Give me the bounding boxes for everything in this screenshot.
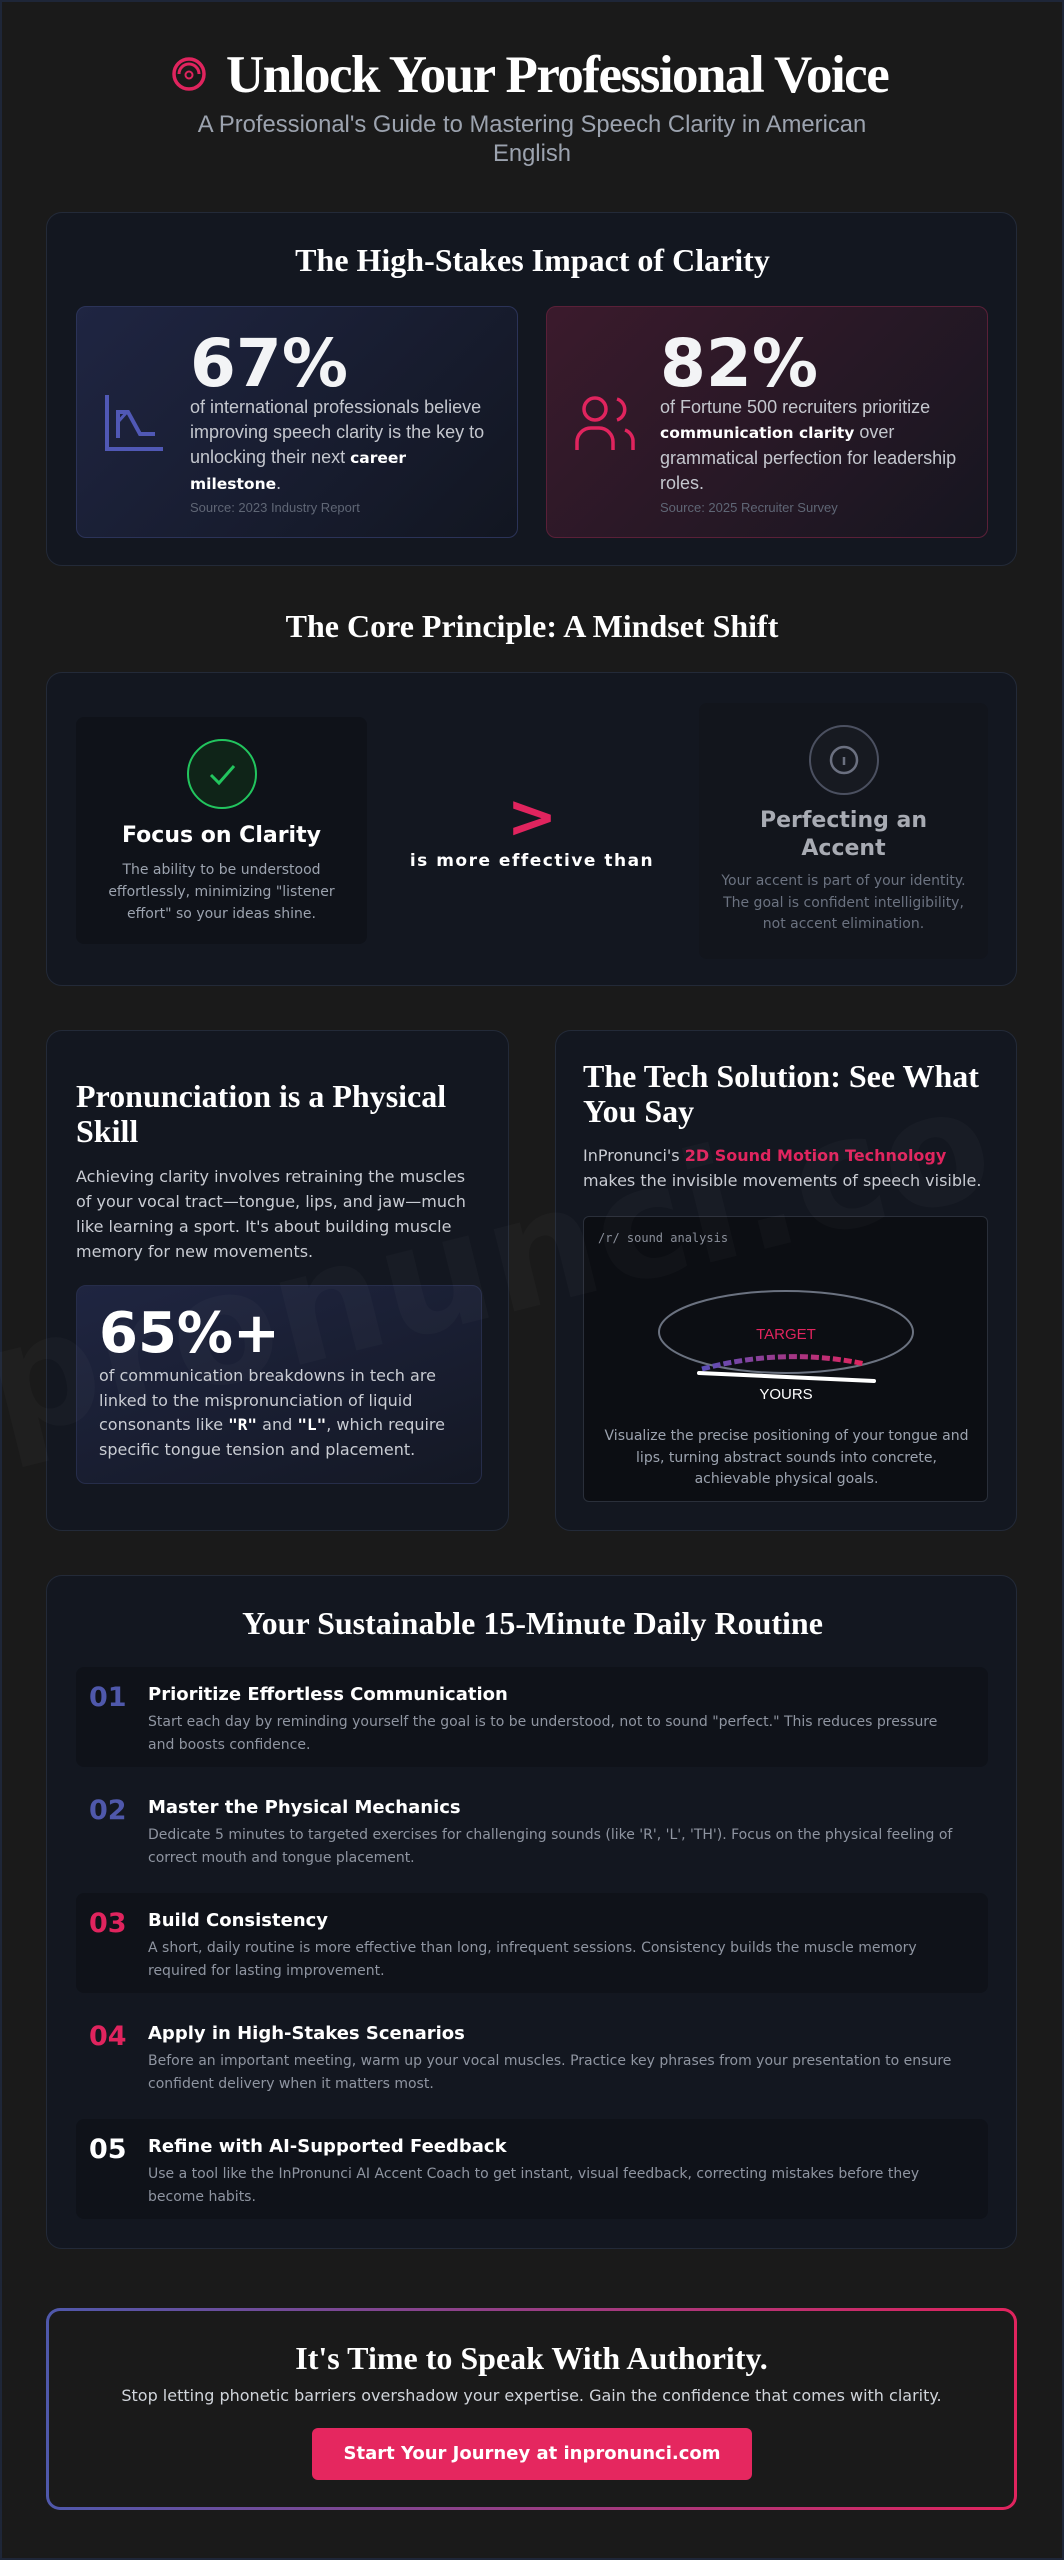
chart: target vs yours [658, 1290, 914, 1403]
stat card: 82% [546, 306, 988, 538]
step 05: Refine with AI-Supported Feedback [148, 2136, 507, 2157]
step 02: Master the Physical Mechanics [148, 1797, 461, 1818]
step 03: Build Consistency [148, 1910, 328, 1931]
step 02: 02 [89, 1795, 127, 1826]
step 03: 03 [89, 1908, 127, 1939]
stat card: 82%: Source: 2025 Recruiter Survey [660, 500, 838, 515]
panel: tech solution [555, 1030, 1017, 1531]
analysis visual: Visualize the precise positioning of your tongue and lips, turning abstract sounds into concrete, achievable physical goals. [605, 1428, 968, 1487]
paragraph: Achieving clarity involves retraining the muscles of your vocal tract—tongue, lips, and jaw—much like learning a sport. It's about building muscle memory for new movements. [76, 1167, 466, 1261]
step 02: Dedicate 5 minutes to targeted exercises for challenging sounds (like 'R', 'L', 'TH'). Focus on the physical feeling of correct mouth and tongue placement. [148, 1827, 952, 1866]
analysis visual [583, 1216, 988, 1502]
step 01: Start each day by reminding yourself the goal is to be understood, not to sound "perfect." This reduces pressure and boosts confidence. [148, 1714, 937, 1752]
chart: target vs yours: TARGET [756, 1326, 816, 1343]
box: perfecting accent: Accent [801, 836, 886, 861]
panel: high-stakes impact [46, 212, 1017, 566]
stat card: 82%: 82% [660, 325, 818, 402]
step 05: 05 [89, 2134, 127, 2165]
box: focus on clarity: Focus on Clarity [122, 823, 321, 848]
heading: The Tech Solution: See What You Say [583, 1058, 979, 1129]
stat card: 67%: Source: 2023 Industry Report [190, 500, 360, 515]
stat box: 65%+: 65%+ [99, 1301, 280, 1366]
comparison arrow [410, 782, 654, 871]
step 01: Prioritize Effortless Communication [148, 1684, 508, 1705]
icon: target [172, 57, 206, 91]
step 01 [76, 1667, 988, 1767]
step 04 [89, 2021, 951, 2092]
box: focus on clarity: The ability to be understood effortlessly, minimizing "listener effort" so your ideas shine. [108, 862, 335, 922]
comparison arrow: > [507, 782, 557, 852]
step 05 [76, 2119, 988, 2219]
step 05: Use a tool like the InPronunci AI Accent Coach to get instant, visual feedback, correcting mistakes before they become habits. [148, 2166, 919, 2204]
step 04: Before an important meeting, warm up your vocal muscles. Practice key phrases from your presentation to ensure confident delivery when it matters most. [148, 2053, 951, 2092]
stat box: 65%+: of communication breakdowns in tech are linked to the mispronunciation of liquid consonants like "R" and "L", which require specific tongue tension and placement. [99, 1366, 445, 1458]
heading: It's Time to Speak With Authority. [295, 2340, 768, 2376]
analysis visual: /r/ sound analysis [598, 1231, 728, 1245]
icon: info [809, 725, 879, 795]
button [312, 2428, 752, 2480]
panel: physical skill [46, 1030, 509, 1531]
stat card: 67%: 67% [190, 325, 348, 402]
box: perfecting accent: Perfecting an [760, 808, 927, 833]
step 02 [89, 1795, 953, 1866]
heading: core principle: The Core Principle: A Mindset Shift [286, 608, 778, 644]
stat card: 67% [76, 306, 518, 538]
panel: call to action [46, 2308, 1017, 2510]
panel: mindset shift [46, 672, 1017, 986]
stat card: 67%: of international professionals believe improving speech clarity is the key to unlocking their next career milestone. [190, 397, 484, 493]
button: Start Your Journey at inpronunci.com [344, 2443, 720, 2464]
subtitle: A Professional's Guide to Mastering Speech Clarity in American English [198, 111, 866, 167]
icon: chart [105, 395, 163, 451]
comparison arrow: is more effective than [410, 851, 654, 871]
icon: check [187, 739, 257, 809]
box: perfecting accent: Your accent is part of your identity. The goal is confident intelligibility, not accent elimination. [721, 873, 966, 932]
step 03: A short, daily routine is more effective than long, infrequent sessions. Consistency builds the muscle memory required for lasting improvement. [148, 1940, 917, 1978]
title: Unlock Your Professional Voice [226, 46, 888, 104]
stat box: 65%+ [76, 1285, 482, 1484]
heading: Your Sustainable 15-Minute Daily Routine [242, 1605, 823, 1641]
subtext: Stop letting phonetic barriers overshadow your expertise. Gain the confidence that comes with clarity. [121, 2386, 942, 2405]
stat card: 82%: of Fortune 500 recruiters prioritize communication clarity over grammatical perfection for leadership roles. [660, 397, 956, 493]
step 04: 04 [89, 2021, 127, 2052]
panel: daily routine [46, 1575, 1017, 2249]
heading: The High-Stakes Impact of Clarity [295, 242, 770, 278]
step 04: Apply in High-Stakes Scenarios [148, 2023, 465, 2044]
box: perfecting accent [699, 703, 988, 959]
icon: users [575, 396, 635, 450]
chart: target vs yours: YOURS [759, 1386, 813, 1403]
heading: Pronunciation is a Physical Skill [76, 1078, 446, 1149]
step 03 [76, 1893, 988, 1993]
paragraph: InPronunci's 2D Sound Motion Technology makes the invisible movements of speech visible. [583, 1146, 981, 1190]
box: focus on clarity [76, 717, 367, 944]
step 01: 01 [89, 1682, 127, 1713]
